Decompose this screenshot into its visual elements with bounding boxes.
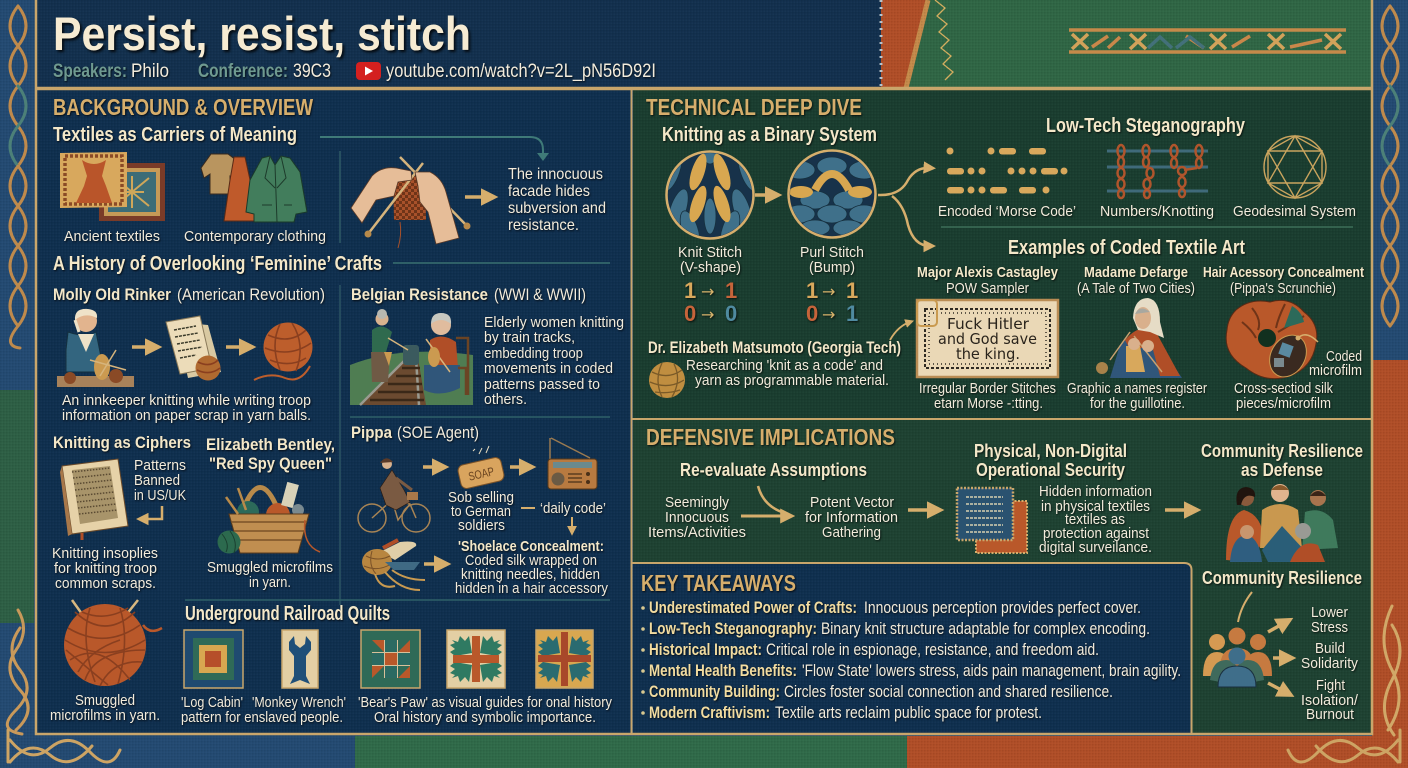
icon: youtube: [356, 62, 381, 80]
takeaway: modern craftivism: Modern Craftivism:: [649, 703, 770, 722]
quilt captions: [181, 694, 612, 726]
text: lower stress: Stress: [1311, 619, 1348, 636]
takeaway: low-tech steganography: [641, 619, 1150, 638]
text: smuggled microfilms: in yarn.: [249, 574, 291, 591]
text: knitting insoplies: [52, 545, 158, 592]
text: shoelace concealment: knitting needles, hidden: [461, 566, 600, 583]
text: elizabeth matsumoto: Dr. Elizabeth Matsumoto (Georgia Tech): [648, 338, 901, 357]
text: belgian resistance: Elderly women knitting: [484, 314, 624, 331]
header ornament band: [1069, 30, 1346, 52]
binary table: purl: [806, 278, 858, 326]
arrow: [226, 345, 248, 349]
binary table: knit: 0: [684, 301, 696, 326]
heading: community resilience: Community Resilience: [1202, 568, 1362, 588]
icon: women knitting by train tracks: [350, 309, 473, 405]
text: shoelace concealment: [455, 538, 608, 597]
icon: stacked fabric: [957, 488, 1027, 553]
text: innocuous facade: subversion and: [508, 200, 606, 217]
text: seemingly innocuous: Seemingly: [665, 494, 729, 511]
text: knitting insoplies: Knitting insoplies: [52, 545, 158, 562]
takeaway: mental health: Mental Health Benefits:: [649, 661, 797, 680]
subheading: physical non-digital: [974, 441, 1127, 480]
takeaway: low-tech steganography: Low-Tech Steganography:: [649, 619, 817, 638]
icon: ancient textiles: [60, 152, 165, 221]
subheading: physical non-digital: Physical, Non-Digital: [974, 441, 1127, 461]
text: patterns banned: Banned: [134, 472, 180, 489]
quilt: bear's paw green: [361, 630, 420, 688]
example titles: Madame Defarge: [1084, 264, 1188, 281]
quilt: monkey wrench: [282, 630, 318, 688]
bottom corner knot ornaments: [8, 730, 1400, 762]
text: sob selling: Sob selling: [448, 489, 514, 506]
icon: soap bar: SOAP: [467, 464, 495, 484]
icon: knit stitch circle: [665, 150, 755, 240]
arrow: [423, 465, 441, 469]
text: innocuous facade: facade hides: [508, 183, 590, 200]
example captions: etarn Morse -:tting.: [934, 395, 1043, 412]
text: lower stress: Lower: [1311, 604, 1348, 621]
speaker and conference line: Philo: [131, 61, 169, 82]
icon: yarn ball: [254, 322, 312, 380]
arrow: curved to sampler: [890, 322, 910, 340]
text: potent vector: for Information: [805, 509, 898, 526]
binary table: purl: 0: [806, 301, 818, 326]
icon: paper notes and yarn: [166, 316, 221, 380]
label: coded microfilm: Coded: [1326, 348, 1362, 365]
quilt captions: 'Bear's Paw' as visual guides for onal history: [358, 694, 612, 711]
subheading: community resilience as defense: as Defense: [1241, 460, 1323, 480]
takeaway: underestimated power: Underestimated Power of Crafts:: [649, 598, 857, 617]
heading: examples of coded textile art: Examples of Coded Textile Art: [1008, 237, 1245, 259]
icon: morse code rows: [946, 148, 1068, 194]
text: innocuous facade: resistance.: [508, 217, 579, 234]
binary table: knit: 1: [725, 278, 737, 303]
text: sob selling: soldiers: [458, 517, 505, 534]
takeaway: modern craftivism: [641, 703, 1042, 722]
text: innkeeper: An innkeeper knitting while writing troop: [62, 392, 311, 409]
left border braid ornament: [7, 6, 28, 734]
speaker and conference line: [53, 61, 331, 82]
icon: pow sampler: Fuck Hitler: [947, 315, 1030, 333]
label: coded microfilm: microfilm: [1309, 362, 1362, 379]
labels: steganography: Encoded ‘Morse Code’: [938, 203, 1076, 220]
text: daily code: ‘daily code’: [540, 500, 606, 517]
text: smuggled microfilms: [207, 559, 333, 591]
arrow: [424, 562, 443, 566]
example captions: [919, 380, 1333, 412]
text: smuggled microfilms in yarn: Smuggled: [75, 692, 135, 709]
icon: basket with yarn: [218, 482, 320, 554]
takeaway: mental health: 'Flow State' lowers stress, aids pain management, brain agility.: [802, 661, 1181, 680]
takeaway: historical impact: Historical Impact:: [649, 640, 762, 659]
icon: small gold yarn ball: [649, 362, 685, 398]
quilt captions: 'Monkey Wrench': [252, 694, 346, 711]
text: hidden information: textiles as: [1065, 511, 1125, 528]
quilt captions: pattern for enslaved people.: [181, 709, 343, 726]
text: elizabeth matsumoto: yarn as programmable material.: [695, 372, 889, 389]
example captions: Irregular Border Stitches: [919, 380, 1056, 397]
example titles: (A Tale of Two Cities): [1077, 280, 1195, 297]
label: coded microfilm: [1309, 348, 1362, 379]
labels: knit and purl stitch: (V-shape): [680, 259, 741, 276]
text: shoelace concealment: Coded silk wrapped on: [465, 552, 597, 569]
heading: low-tech steganography: Low-Tech Steganography: [1046, 115, 1246, 137]
takeaway: mental health: [641, 661, 1181, 680]
example titles: (Pippa's Scrunchie): [1230, 280, 1336, 297]
icon: radio: [548, 438, 597, 489]
text: build solidarity: [1301, 640, 1358, 672]
panel: key takeaways: [641, 570, 1181, 722]
example titles: Hair Acessory Concealment: [1203, 264, 1364, 281]
heading: elizabeth bentley: [206, 435, 335, 473]
text: seemingly innocuous: Innocuous: [665, 509, 729, 526]
arrow: down: [571, 517, 573, 531]
example titles: POW Sampler: [946, 280, 1029, 297]
icon: geodesic circle: [1264, 136, 1326, 198]
icon: soap bar: [457, 446, 505, 490]
heading: pippa: Pippa: [351, 423, 392, 442]
text: shoelace concealment: hidden in a hair accessory: [455, 580, 608, 597]
quilt: log cabin: [184, 630, 243, 688]
icon: knotted threads: [1107, 145, 1208, 198]
text: belgian resistance: patterns passed to: [484, 376, 600, 393]
quilt: bear's paw gold: [536, 630, 593, 688]
text: potent vector: [805, 494, 898, 541]
example titles: Major Alexis Castagley: [917, 264, 1059, 281]
example captions: Cross-sectiod silk: [1234, 380, 1333, 397]
text: fight isolation burnout: [1301, 677, 1359, 723]
example captions: for the guillotine.: [1090, 395, 1185, 412]
heading: knitting as ciphers: Knitting as Ciphers: [53, 433, 191, 452]
text: innkeeper: [62, 392, 311, 424]
labels: steganography: Geodesimal System: [1233, 203, 1356, 220]
text: hidden information: protection against: [1043, 525, 1150, 542]
icon: pow sampler: [917, 300, 1058, 377]
takeaway: modern craftivism: Textile arts reclaim public space for protest.: [775, 703, 1042, 722]
icon: cipher pattern book: [60, 459, 128, 540]
speaker and conference line: Conference:: [198, 61, 288, 82]
icon: purl stitch circle: [785, 150, 879, 238]
heading: elizabeth bentley: Elizabeth Bentley,: [206, 435, 335, 454]
text: belgian resistance: movements in coded: [484, 360, 613, 377]
subheading: physical non-digital: Operational Security: [976, 460, 1125, 480]
panel backgrounds: [37, 90, 1371, 733]
text: patterns banned: [134, 457, 186, 504]
arrow: [1165, 508, 1193, 512]
example captions: pieces/microfilm: [1236, 395, 1331, 412]
text: hidden information: digital surveilance.: [1039, 539, 1152, 556]
icon: innkeeper knitting: [57, 309, 134, 387]
text: hidden information: in physical textiles: [1041, 498, 1150, 515]
panel: technical deep dive: [646, 94, 1364, 412]
arrow: to potent vector: [741, 486, 788, 516]
icon: pow sampler: the king.: [956, 345, 1020, 363]
text: belgian resistance: others.: [484, 391, 527, 408]
panel: community resilience: [1202, 568, 1362, 723]
heading: elizabeth bentley: "Red Spy Queen": [209, 454, 332, 473]
text: seemingly innocuous: [648, 494, 746, 541]
quilt: bear's paw cream: [447, 630, 505, 688]
subheading: textiles: Textiles as Carriers of Meaning: [53, 124, 297, 146]
heading: key takeaways: KEY TAKEAWAYS: [641, 570, 796, 596]
icon: madame defarge knitting: [1096, 298, 1182, 378]
label: contemporary clothing: Contemporary clothing: [184, 228, 326, 245]
labels: knit and purl stitch: Knit Stitch: [678, 244, 742, 261]
text: hidden information: [1039, 483, 1152, 556]
icon: large yarn ball with needles: [64, 600, 162, 686]
text: smuggled microfilms: Smuggled microfilms: [207, 559, 333, 576]
text: fight isolation burnout: Isolation/: [1301, 692, 1359, 709]
text: shoelace concealment: 'Shoelace Concealment:: [458, 538, 604, 555]
arrow: [132, 345, 154, 349]
takeaway: low-tech steganography: Binary knit structure adaptable for complex encoding.: [821, 619, 1150, 638]
binary table: knit: →: [701, 305, 714, 324]
heading: background: BACKGROUND & OVERVIEW: [53, 94, 313, 120]
text: build solidarity: Build: [1315, 640, 1345, 657]
label: ancient textiles: Ancient textiles: [64, 228, 160, 245]
text: elizabeth matsumoto: Researching 'knit as a code' and: [686, 357, 883, 374]
labels: steganography: Numbers/Knotting: [1100, 203, 1214, 220]
binary table: knit: →: [701, 282, 714, 301]
icon: pow sampler: and God save: [938, 330, 1037, 348]
heading: belgian resistance: Belgian Resistance: [351, 285, 488, 304]
heading: pippa: (SOE Agent): [397, 423, 479, 442]
labels: knit and purl stitch: (Bump): [809, 259, 855, 276]
text: sob selling: to German: [451, 503, 511, 520]
text: sob selling: [448, 489, 514, 534]
takeaway: historical impact: [641, 640, 1099, 659]
text: smuggled microfilms in yarn: microfilms in yarn.: [50, 707, 160, 724]
icon: contemporary clothing: [201, 154, 307, 222]
labels: knit and purl stitch: Purl Stitch: [800, 244, 864, 261]
panel: background and overview: [50, 94, 624, 726]
text: seemingly innocuous: Items/Activities: [648, 524, 746, 541]
icon: shoelace concealment: [362, 540, 425, 590]
text: hidden information: Hidden information: [1039, 483, 1152, 500]
text: innocuous facade: [508, 166, 606, 234]
labels: steganography: [938, 203, 1356, 220]
quilt captions: 'Log Cabin': [181, 694, 243, 711]
text: potent vector: Gathering: [822, 524, 881, 541]
binary table: knit: 1: [684, 278, 696, 303]
title: Persist, resist, stitch: [53, 7, 471, 60]
binary table: purl: →: [822, 282, 835, 301]
takeaway: community building: [641, 682, 1113, 701]
heading: technical deep dive: TECHNICAL DEEP DIVE: [646, 94, 862, 120]
takeaway: community building: Circles foster social connection and shared resilience.: [784, 682, 1113, 701]
panel: defensive implications: [646, 424, 1363, 562]
binary table: knit: [684, 278, 737, 326]
arrow: hands to text: [465, 195, 490, 199]
takeaway: community building: Community Building:: [649, 682, 780, 701]
heading: belgian resistance: (WWI & WWII): [494, 285, 586, 304]
heading: pippa: [351, 423, 479, 442]
text: smuggled microfilms in yarn: [50, 692, 160, 724]
youtube link: youtube.com/watch?v=2L_pN56D92I: [386, 61, 656, 82]
text: belgian resistance: [484, 314, 624, 408]
binary table: purl: 1: [846, 278, 858, 303]
icon: woman on bicycle: [358, 458, 430, 532]
text: patterns banned: in US/UK: [134, 487, 186, 504]
subheading: community resilience as defense: [1201, 441, 1363, 480]
right border braid ornament: [1382, 6, 1400, 735]
text: belgian resistance: embedding troop: [484, 345, 583, 362]
text: patterns banned: Patterns: [134, 457, 186, 474]
text: knitting insoplies: for knitting troop: [54, 560, 157, 577]
speaker and conference line: 39C3: [293, 61, 331, 82]
text: potent vector: Potent Vector: [810, 494, 894, 511]
arrow: l-shaped: [142, 506, 162, 519]
text: innocuous facade: The innocuous: [508, 166, 603, 183]
binary table: purl: 1: [846, 301, 858, 326]
icon: knitting hands: [351, 157, 470, 248]
text: elizabeth matsumoto: [648, 338, 901, 389]
icon: scrunchie cross-section: [1226, 300, 1318, 384]
arrows: outcomes: [1268, 622, 1288, 693]
heading: molly old rinker: Molly Old Rinker: [53, 285, 171, 304]
heading: underground railroad quilts: Underground Railroad Quilts: [185, 603, 390, 625]
takeaway: underestimated power: Innocuous perception provides perfect cover.: [864, 598, 1141, 617]
arrow: teal connector: [320, 137, 549, 161]
example captions: Graphic a names register: [1067, 380, 1207, 397]
icon: community knitting circle: [1226, 484, 1338, 562]
text: build solidarity: Solidarity: [1301, 655, 1358, 672]
takeaway: historical impact: Critical role in espionage, resistance, and freedom aid.: [766, 640, 1099, 659]
text: belgian resistance: by train tracks,: [484, 329, 575, 346]
text: fight isolation burnout: Fight: [1316, 677, 1346, 694]
heading: defensive implications: DEFENSIVE IMPLICATIONS: [646, 424, 895, 450]
subheading: re-evaluate assumptions: Re-evaluate Assumptions: [680, 460, 867, 480]
heading: molly old rinker: (American Revolution): [177, 285, 325, 304]
text: lower stress: [1311, 604, 1348, 636]
text: knitting insoplies: common scraps.: [55, 575, 156, 592]
arrow: knit to purl: [755, 193, 774, 197]
takeaway: underestimated power: [641, 598, 1141, 617]
example titles: [917, 264, 1364, 297]
icon: group of people: [1203, 628, 1272, 687]
binary table: purl: 1: [806, 278, 818, 303]
speaker and conference line: Speakers:: [53, 61, 127, 82]
binary table: purl: →: [822, 305, 835, 324]
labels: knit and purl stitch: [678, 244, 864, 276]
heading: molly old rinker: [53, 285, 325, 304]
binary table: knit: 0: [725, 301, 737, 326]
arrow: [510, 465, 528, 469]
curved connector: [1238, 592, 1252, 622]
text: fight isolation burnout: Burnout: [1306, 706, 1355, 723]
arrows: branching to steganography and examples: [878, 168, 930, 246]
quilt captions: Oral history and symbolic importance.: [374, 709, 596, 726]
heading: belgian resistance: [351, 285, 586, 304]
subheading: knitting binary: Knitting as a Binary System: [662, 124, 877, 146]
arrow: [908, 508, 936, 512]
text: innkeeper: information on paper scrap in yarn balls.: [62, 407, 311, 424]
subheading: overlooking feminine crafts: A History of Overlooking ‘Feminine’ Crafts: [53, 253, 382, 275]
subheading: community resilience as defense: Community Resilience: [1201, 441, 1363, 461]
